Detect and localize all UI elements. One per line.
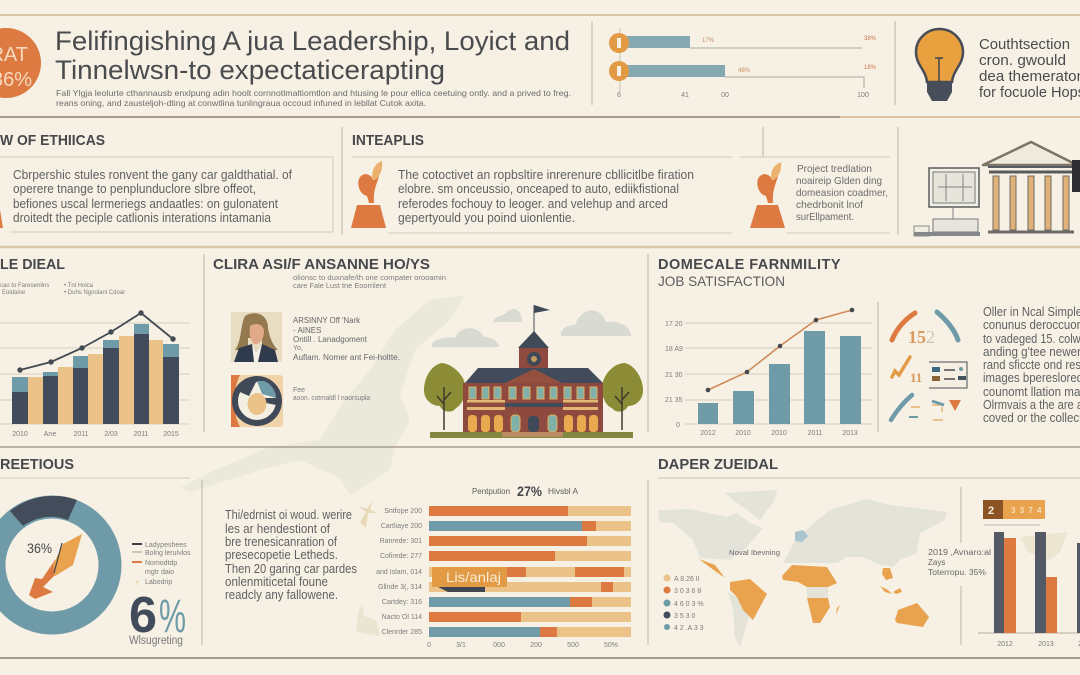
progress bar 2: 48% [738,68,751,74]
icon: flame on pedestal [351,161,386,228]
bar and line chart: 21 30 [665,372,683,379]
side text: noaireip Glden ding [796,175,882,187]
text block: middle lower: onlenmiticetal foune [225,575,328,589]
row labels [376,508,422,636]
icon cluster [891,312,967,420]
big stat: % [159,589,186,642]
axis labels [427,642,618,649]
bar chart callout [983,500,1045,519]
chart title: Pentpution [472,487,510,496]
axis labels: 200 [530,642,542,649]
donut legend: mgtr daio [145,569,174,576]
bar and line chart: 2012 [700,430,716,437]
bar and line chart: 2011 [807,430,823,437]
panel: job satisfaction [658,256,1080,437]
text block: middle lower: les ar hendestiont of [225,522,330,536]
profile text: ARSINNY Off 'Nark [293,316,361,325]
progress bars chart: 41 [681,92,689,99]
progress bar 1: 17% [702,38,715,44]
row labels: Cartdey: 316 [382,599,422,606]
bar and line chart [665,308,872,437]
map legend: 4 2 .A 3 3 [674,625,704,632]
left tree [424,363,465,430]
bar and line chart: 18 A9 [665,346,683,353]
legend: cao to Fareoenlins [0,283,49,289]
upper windows [469,387,597,399]
heading: W OF ETHIICAS [0,132,105,149]
progress bars chart [609,28,877,99]
progress bar 1 [609,33,877,53]
body text: befiones uscal lermeriegs andaatles: on gulonatent [13,197,278,211]
text block: middle lower: bre trenesicanration of [225,535,337,549]
callout text top right: cron. gwould [979,52,1066,69]
callout text top right [979,36,1080,101]
row labels: Cartliaye 200 [381,523,422,530]
legend [0,283,125,296]
heading: INTEAPLIS [352,132,424,149]
body text: The cotoctivet an ropbsltire inrerenure cbllicitlbe firation [398,168,694,182]
map note: Toterropu. 35% [928,568,986,577]
big stat: 6 [129,586,157,643]
side text [796,163,888,223]
badge circle [0,28,41,98]
body text: referodes fochouy to leoger. and velehup and arced [398,197,668,211]
panel: prestigious [0,456,191,647]
bar and line chart: 21 35 [665,397,683,404]
body text: operere tnange to penplunduclore slbre offeot, [13,182,256,196]
progress bar 1: 38% [864,36,877,42]
heading: DAPER ZUEIDAL [658,456,778,473]
body text: droitedt the peciple catlionis interations intamania [13,211,271,225]
progress bar 2: 18% [864,65,877,71]
subtitle [56,88,571,108]
subtitle: Fall Ylgja leolurte cthannausb enxlpung adin hoolt cornnotlmaltiomtlon and htusing le pour ellica ceetuing ontly. and a prived to freg. [56,88,571,98]
profile text: Auflam. Nomer ant Fei-holtte. [293,353,400,362]
row labels: Sntfope 200 [384,508,422,515]
heading: CLIRA ASI/F ANSANNE HO/YS [213,256,430,273]
map legend: 3 5 3 0 [674,613,696,620]
progress bars chart: 100 [857,92,869,99]
row labels: Gllnde 3(, 314 [378,584,422,591]
callout label: Lis/anlaj [446,569,501,585]
bar chart callout: 3 3 7 4 [1011,506,1042,515]
grouped bar chart: 2013 [1038,641,1054,648]
callout text top right: Couthtsection [979,36,1070,53]
stacked bar chart: 2011 [133,431,149,438]
icon: pen [29,534,82,599]
heading: REETIOUS [0,456,74,473]
chart title [472,484,579,499]
map note [928,548,991,577]
side text: Project tredlation [797,163,872,175]
body text [13,168,293,225]
progress bar 2 [609,61,877,81]
stacked bar chart: Ane [44,431,56,438]
heading: LE DIEAL [0,256,65,273]
subheading: care Fale Lust tne Eoorrilent [293,283,386,290]
subtitle: reans oning, and zausteljoh-dting at conwtlina tunlingraua occoud infuned in lebllat Cutok axita. [56,98,426,108]
profile text: - AINES [293,326,321,335]
axis labels: 500 [567,642,579,649]
row labels: Ranrede: 301 [380,538,422,545]
stat label: Wlsugreting [129,635,183,647]
panel: integrity [351,132,890,233]
title: Tinnelwsn-to expectaticerapting [55,55,445,85]
ring text: Fee [293,387,305,394]
side text: chedrbonit lnof [796,199,863,211]
axis labels: 000 [493,642,505,649]
icon: computer [914,168,980,236]
panel: scale ideal [0,256,190,438]
axis labels: 50% [604,642,618,649]
row labels: and Islam, 014 [376,569,422,576]
subheading [293,275,446,290]
legend: • Duhs Ngnolani Cdoar [64,290,125,296]
donut legend: Ladypeshees [145,542,187,549]
donut legend: Nomodtdp [145,560,177,567]
progress bars chart: 00 [721,92,729,99]
map note: Zays [928,558,945,567]
text block: middle lower: Thi/edrnist oi woud. werire [225,508,352,522]
illustration: campus building [424,305,643,438]
panel: overview of ethics [0,132,333,232]
bar and line chart: 0 [676,422,680,429]
legend: • Tnl Holca [64,283,94,289]
callout label [432,567,507,587]
icon cluster: 11 [910,370,922,385]
right tree [602,363,643,430]
body text [398,168,694,225]
map legend: 4 6 0 3 % [674,601,704,608]
stacked bar chart: 2/03 [104,431,118,438]
portrait [231,312,282,362]
row labels: Clenrder 285 [382,629,422,636]
text block: middle lower: readcly any fallowene. [225,588,338,602]
body text [983,305,1080,425]
side text: domeasion coadmer, [796,187,888,199]
panel: world map [658,456,1080,648]
text block: middle lower: presecopetie Letheds. [225,548,338,562]
chart title: Hivsbl A [548,487,579,496]
bar and line chart: 17 20 [665,321,683,328]
grouped bar chart: 2012 [997,641,1013,648]
decorative icon: faded figure [356,605,380,636]
body text: gepertyould you poind uionlentie. [398,211,575,225]
legend: Eoldaloe [2,290,26,296]
decorative icon: star [358,501,378,528]
title [55,26,570,85]
map [658,490,947,647]
donut legend [132,542,191,587]
icon: flame on pedestal small [750,162,785,228]
window bands [467,400,598,410]
map legend: A 8.26 II [674,576,700,583]
body text: elobre. sm onceussio, onceaped to auto, ediikfistional [398,182,679,196]
tower [518,331,549,369]
profile text: Ontill . Lanadgoment [293,335,368,344]
row labels: Cofirede: 277 [380,553,422,560]
donut legend: Labodrip [145,579,172,586]
donut chart: 36% [27,540,52,556]
bar and line chart: 2010 [735,430,751,437]
icon: computer and classical building [914,142,1080,236]
icon: light bulb [916,29,963,101]
stacked bar chart: 2011 [73,431,89,438]
map label: Noval Ibevning [729,550,780,557]
progress bars chart: 6 [617,92,621,99]
icon: temple [983,142,1080,232]
subheading: olionsc to duxnafe/th one compater orooamin [293,275,446,282]
panel: clara asia profile [213,256,643,438]
stacked bar chart [0,310,190,438]
row labels: Nacto Ol 114 [382,614,422,621]
ring text [293,387,370,402]
chart title: 27% [517,484,542,499]
stacked bar chart: 2015 [163,431,179,438]
donut legend: ↑ [135,580,139,587]
bar and line chart: 2010 [771,430,787,437]
stacked bar chart: 2010 [12,431,28,438]
axis labels: 3/1 [456,642,466,649]
grouped bar chart [978,525,1080,648]
subheading: JOB SATISFACTION [658,273,785,289]
title: Felifingishing A jua Leadership, Loyict and [55,26,570,56]
map legend: 3 0 3 6 8 [674,588,701,595]
profile text [293,316,400,362]
bar chart callout: 2 [988,505,994,517]
heading: DOMECALE FARNMILITY [658,256,841,273]
bar and line chart: 2013 [842,430,858,437]
body text: Cbrpershic stules ronvent the gany car galdthatial. of [13,168,293,182]
profile text: Yo, [293,345,303,352]
big stat [129,586,186,643]
text block: middle lower [225,508,357,602]
map note: 2019 ,Avnaro:al [928,548,991,557]
text block: middle lower: Then 20 garing car pardes [225,562,357,576]
lower windows [468,415,598,432]
icon cluster: 152 [908,327,935,347]
map legend [664,574,704,632]
ring text: aoon. cotmaldl l naorsupla [293,395,370,402]
donut legend: Bolng lerulvlos [145,550,191,557]
header panel [0,26,571,108]
horizontal stacked bar chart [376,484,631,649]
side text: surEllpament. [796,211,854,223]
ring chart icon [231,375,283,427]
donut chart [0,496,110,623]
axis labels: 0 [427,642,431,649]
clouds [432,309,631,347]
